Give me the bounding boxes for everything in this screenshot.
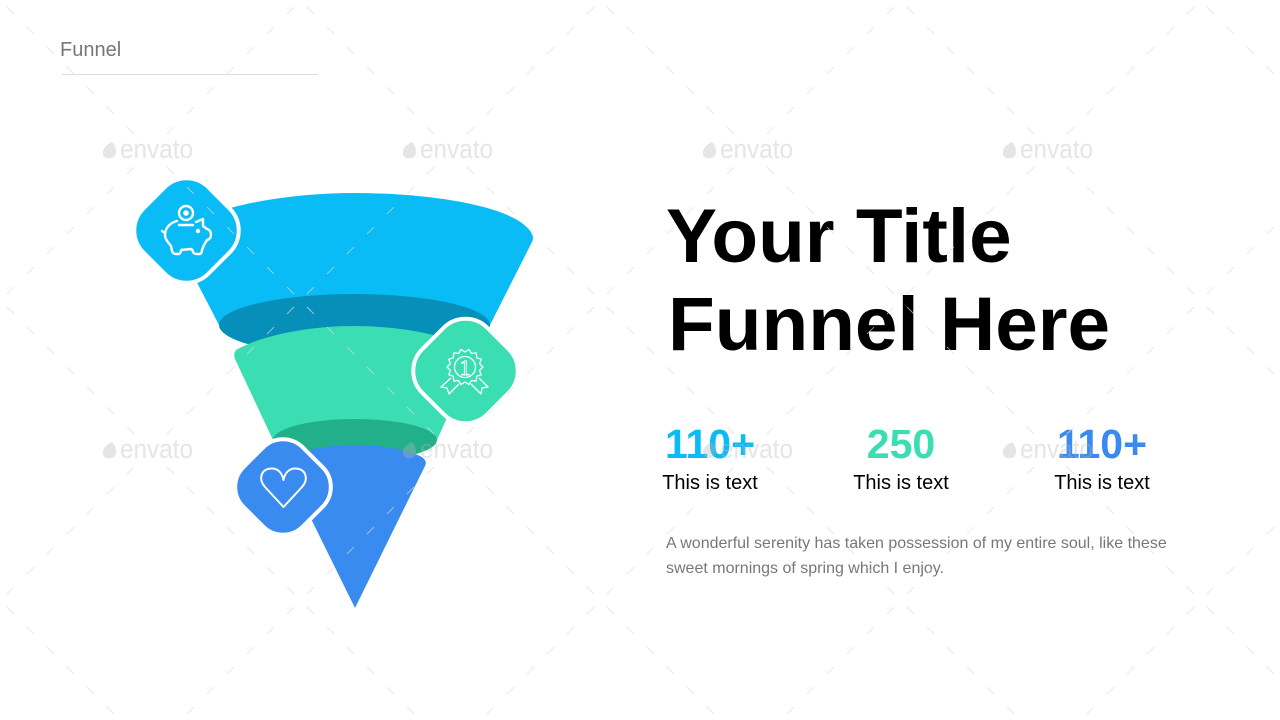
badge: award ribbon [400,306,531,436]
watermark overlay: envato [120,134,193,164]
icon: award ribbon: 1 [460,355,470,380]
watermark overlay: envato [720,434,793,464]
stat 3: 110+ [1057,421,1147,467]
icon: heart [261,468,306,507]
stat 2: This is text [853,472,949,494]
stat 1: 110+ [665,421,755,467]
title: Your Title [666,194,1012,279]
funnel middle segment [234,326,475,440]
description text: sweet mornings of spring which I enjoy. [666,560,944,577]
watermark overlay: envato [420,134,493,164]
funnel diagram [121,165,533,608]
watermark overlay: envato [420,434,493,464]
stat 1 [662,421,758,494]
watermark overlay: envato [720,134,793,164]
stat 3 [1054,421,1150,494]
badge: heart [224,428,342,546]
funnel middle inner ellipse [273,419,437,461]
stat 3: This is text [1054,472,1150,494]
stat 2 [853,421,949,494]
watermark overlay: envato [1020,434,1093,464]
funnel top inner ellipse [219,294,490,356]
funnel top segment [176,193,533,325]
badge: piggy bank [121,165,252,296]
stat 1: This is text [662,472,758,494]
section label: Funnel [60,39,121,61]
title: Funnel Here [668,282,1110,367]
watermark overlay: envato [120,434,193,464]
funnel bottom segment [284,445,426,608]
stat 2: 250 [867,421,935,467]
watermark overlay: envato [1020,134,1093,164]
description text: A wonderful serenity has taken possession of my entire soul, like these [666,535,1167,552]
icon: piggy bank [162,206,211,254]
